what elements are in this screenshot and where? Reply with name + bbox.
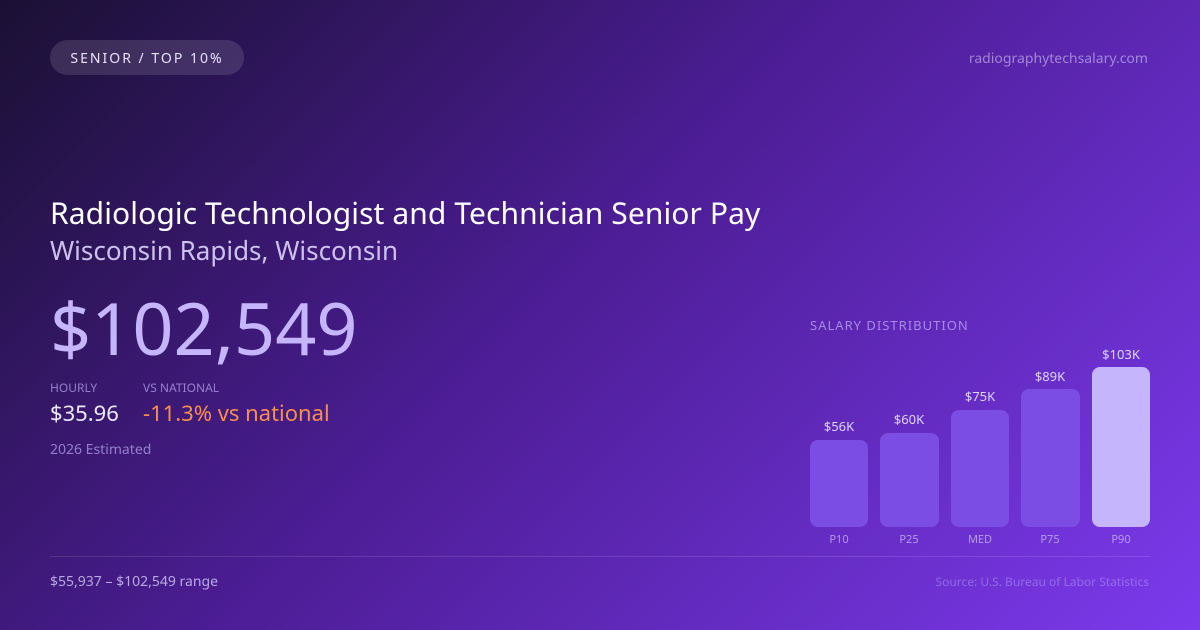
subtitle: location: Wisconsin Rapids, Wisconsin xyxy=(50,232,398,268)
site domain: radiographytechsalary.com xyxy=(969,49,1148,68)
hourly value: $35.96 xyxy=(50,398,119,428)
salary range: $55,937 – $102,549 range xyxy=(50,572,218,591)
main salary figure: $102,549 xyxy=(50,279,358,377)
value: $60K xyxy=(894,410,924,428)
source: Source: U.S. Bureau of Labor Statistics xyxy=(936,573,1149,590)
value: $56K xyxy=(824,417,854,435)
bar MED xyxy=(951,387,1009,547)
stat: hourly xyxy=(50,379,119,428)
bar chart: salary distribution xyxy=(810,316,1150,547)
label: P10 xyxy=(829,532,849,547)
bar P90 xyxy=(1092,345,1150,547)
value: $89K xyxy=(1035,367,1065,385)
hourly label: HOURLY xyxy=(50,379,97,396)
bar P10 xyxy=(810,417,868,547)
value: $103K xyxy=(1102,345,1140,363)
estimate note: 2026 Estimated xyxy=(50,440,151,459)
stat: vs national xyxy=(143,379,330,428)
vs national label: VS NATIONAL xyxy=(143,379,219,396)
vs national value: -11.3% vs national xyxy=(143,398,330,428)
bar P75 xyxy=(1021,367,1080,547)
label: P90 xyxy=(1111,532,1131,547)
value: $75K xyxy=(965,387,995,405)
title: Radiologic Technologist and Technician Senior Pay xyxy=(50,192,760,233)
badge: senior / top 10%: SENIOR / TOP 10% xyxy=(70,49,224,68)
badge: senior / top 10% xyxy=(50,40,244,75)
label: MED xyxy=(968,532,992,547)
label: P25 xyxy=(899,532,919,547)
chart heading: SALARY DISTRIBUTION xyxy=(810,316,969,334)
label: P75 xyxy=(1040,532,1060,547)
bar P25 xyxy=(880,410,939,547)
